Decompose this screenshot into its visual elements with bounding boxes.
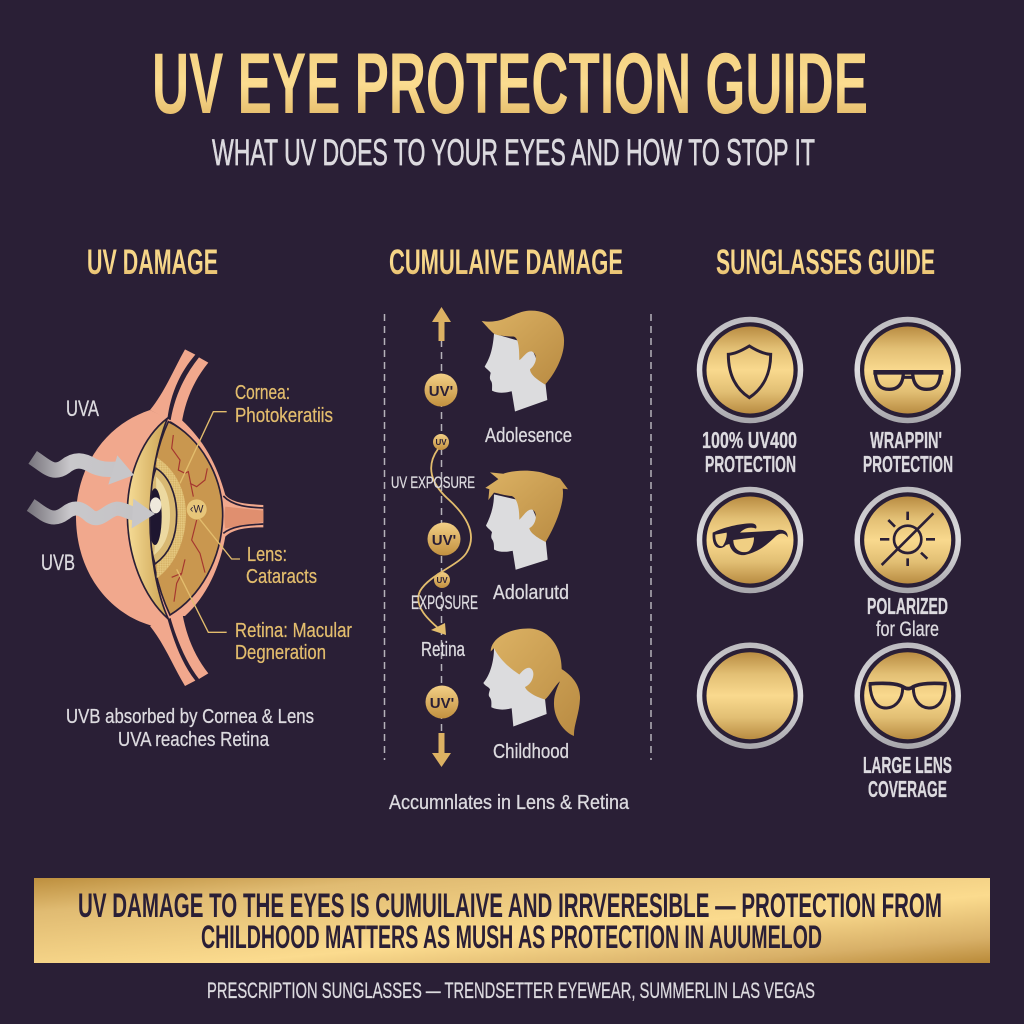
callout: lens: [246, 544, 317, 588]
callout: cornea: Cornea:: [235, 382, 290, 404]
callout: retina: [235, 620, 352, 664]
icon: wraparound sunglasses: [700, 490, 800, 590]
label: exposure: EXPOSURE: [411, 593, 478, 614]
label: UVA: UVA: [66, 396, 99, 421]
callout: lens: Lens:: [247, 544, 287, 566]
label: UV400: [702, 427, 797, 477]
arrow: up: [432, 307, 451, 341]
label: Childhood: Childhood: [493, 741, 569, 763]
label: UV exposure: UV EXPOSURE: [391, 473, 475, 492]
caption: accumulates: Accumnlates in Lens & Retina: [389, 792, 630, 814]
exposure curve arrow: [418, 449, 471, 635]
UV marker: small lower: [434, 572, 450, 588]
heading: UV damage: UV DAMAGE: [87, 243, 218, 282]
eye cross-section diagram: ‹W: [190, 504, 204, 516]
banner text: [78, 887, 942, 955]
UV marker: top: [424, 374, 458, 406]
UV marker: small lower: UV: [436, 576, 448, 585]
icon: shield: [700, 320, 800, 420]
UV marker: bottom: [426, 686, 458, 718]
eye cross-section diagram: [31, 349, 263, 686]
label: wrap protection: PROTECTION: [863, 451, 953, 477]
UV marker: middle: [428, 522, 460, 556]
panel: sunglasses guide: [700, 243, 958, 802]
icon: glasses: [857, 320, 958, 420]
caption: absorption: UVB absorbed by Cornea & Lens: [66, 706, 314, 728]
caption: absorption: UVA reaches Retina: [118, 729, 270, 751]
label: polarized: POLARIZED: [867, 593, 948, 619]
label: wrap protection: [863, 427, 953, 477]
UV marker: small top: [433, 434, 449, 450]
label: UVB: UVB: [41, 550, 75, 575]
icon: polarized sun: [857, 490, 958, 590]
icon: large lens glasses: [857, 645, 958, 746]
banner: [34, 878, 990, 963]
panel: cumulative damage: [384, 243, 651, 814]
callout: cornea: [235, 382, 333, 427]
head: adult: [485, 471, 568, 570]
label: large lens: COVERAGE: [868, 776, 947, 802]
UV marker: top: UV': [429, 383, 453, 400]
label: wrap protection: WRAPPIN': [870, 427, 942, 453]
label: UV400: PROTECTION: [705, 451, 796, 477]
callout: retina: Retina: Macular: [235, 620, 352, 642]
label: UV400: 100% UV400: [702, 427, 797, 453]
head: child: [483, 629, 580, 736]
UV marker: middle: UV': [432, 532, 456, 549]
icon: empty medallion: [700, 645, 800, 746]
label: large lens: [863, 752, 952, 802]
heading: cumulative damage: CUMULAIVE DAMAGE: [389, 243, 623, 282]
arrow: down: [432, 733, 451, 767]
callout: lens: Cataracts: [246, 566, 317, 588]
UV marker: small top: UV: [435, 438, 447, 447]
caption: absorption: [66, 706, 314, 751]
label: polarized: [867, 593, 948, 641]
head: adolescent: [482, 311, 564, 412]
label: Adolesence: Adolesence: [485, 425, 572, 447]
panel: UV damage: [31, 243, 352, 751]
UV marker: bottom: UV': [430, 695, 454, 712]
label: polarized: for Glare: [876, 618, 939, 641]
label: Adolarutd: Adolarutd: [493, 582, 569, 604]
label: large lens: LARGE LENS: [863, 752, 952, 778]
callout: retina: Degneration: [235, 642, 326, 664]
callout: cornea: Photokeratiis: [235, 405, 333, 427]
label: retina: Retina: [421, 639, 466, 661]
